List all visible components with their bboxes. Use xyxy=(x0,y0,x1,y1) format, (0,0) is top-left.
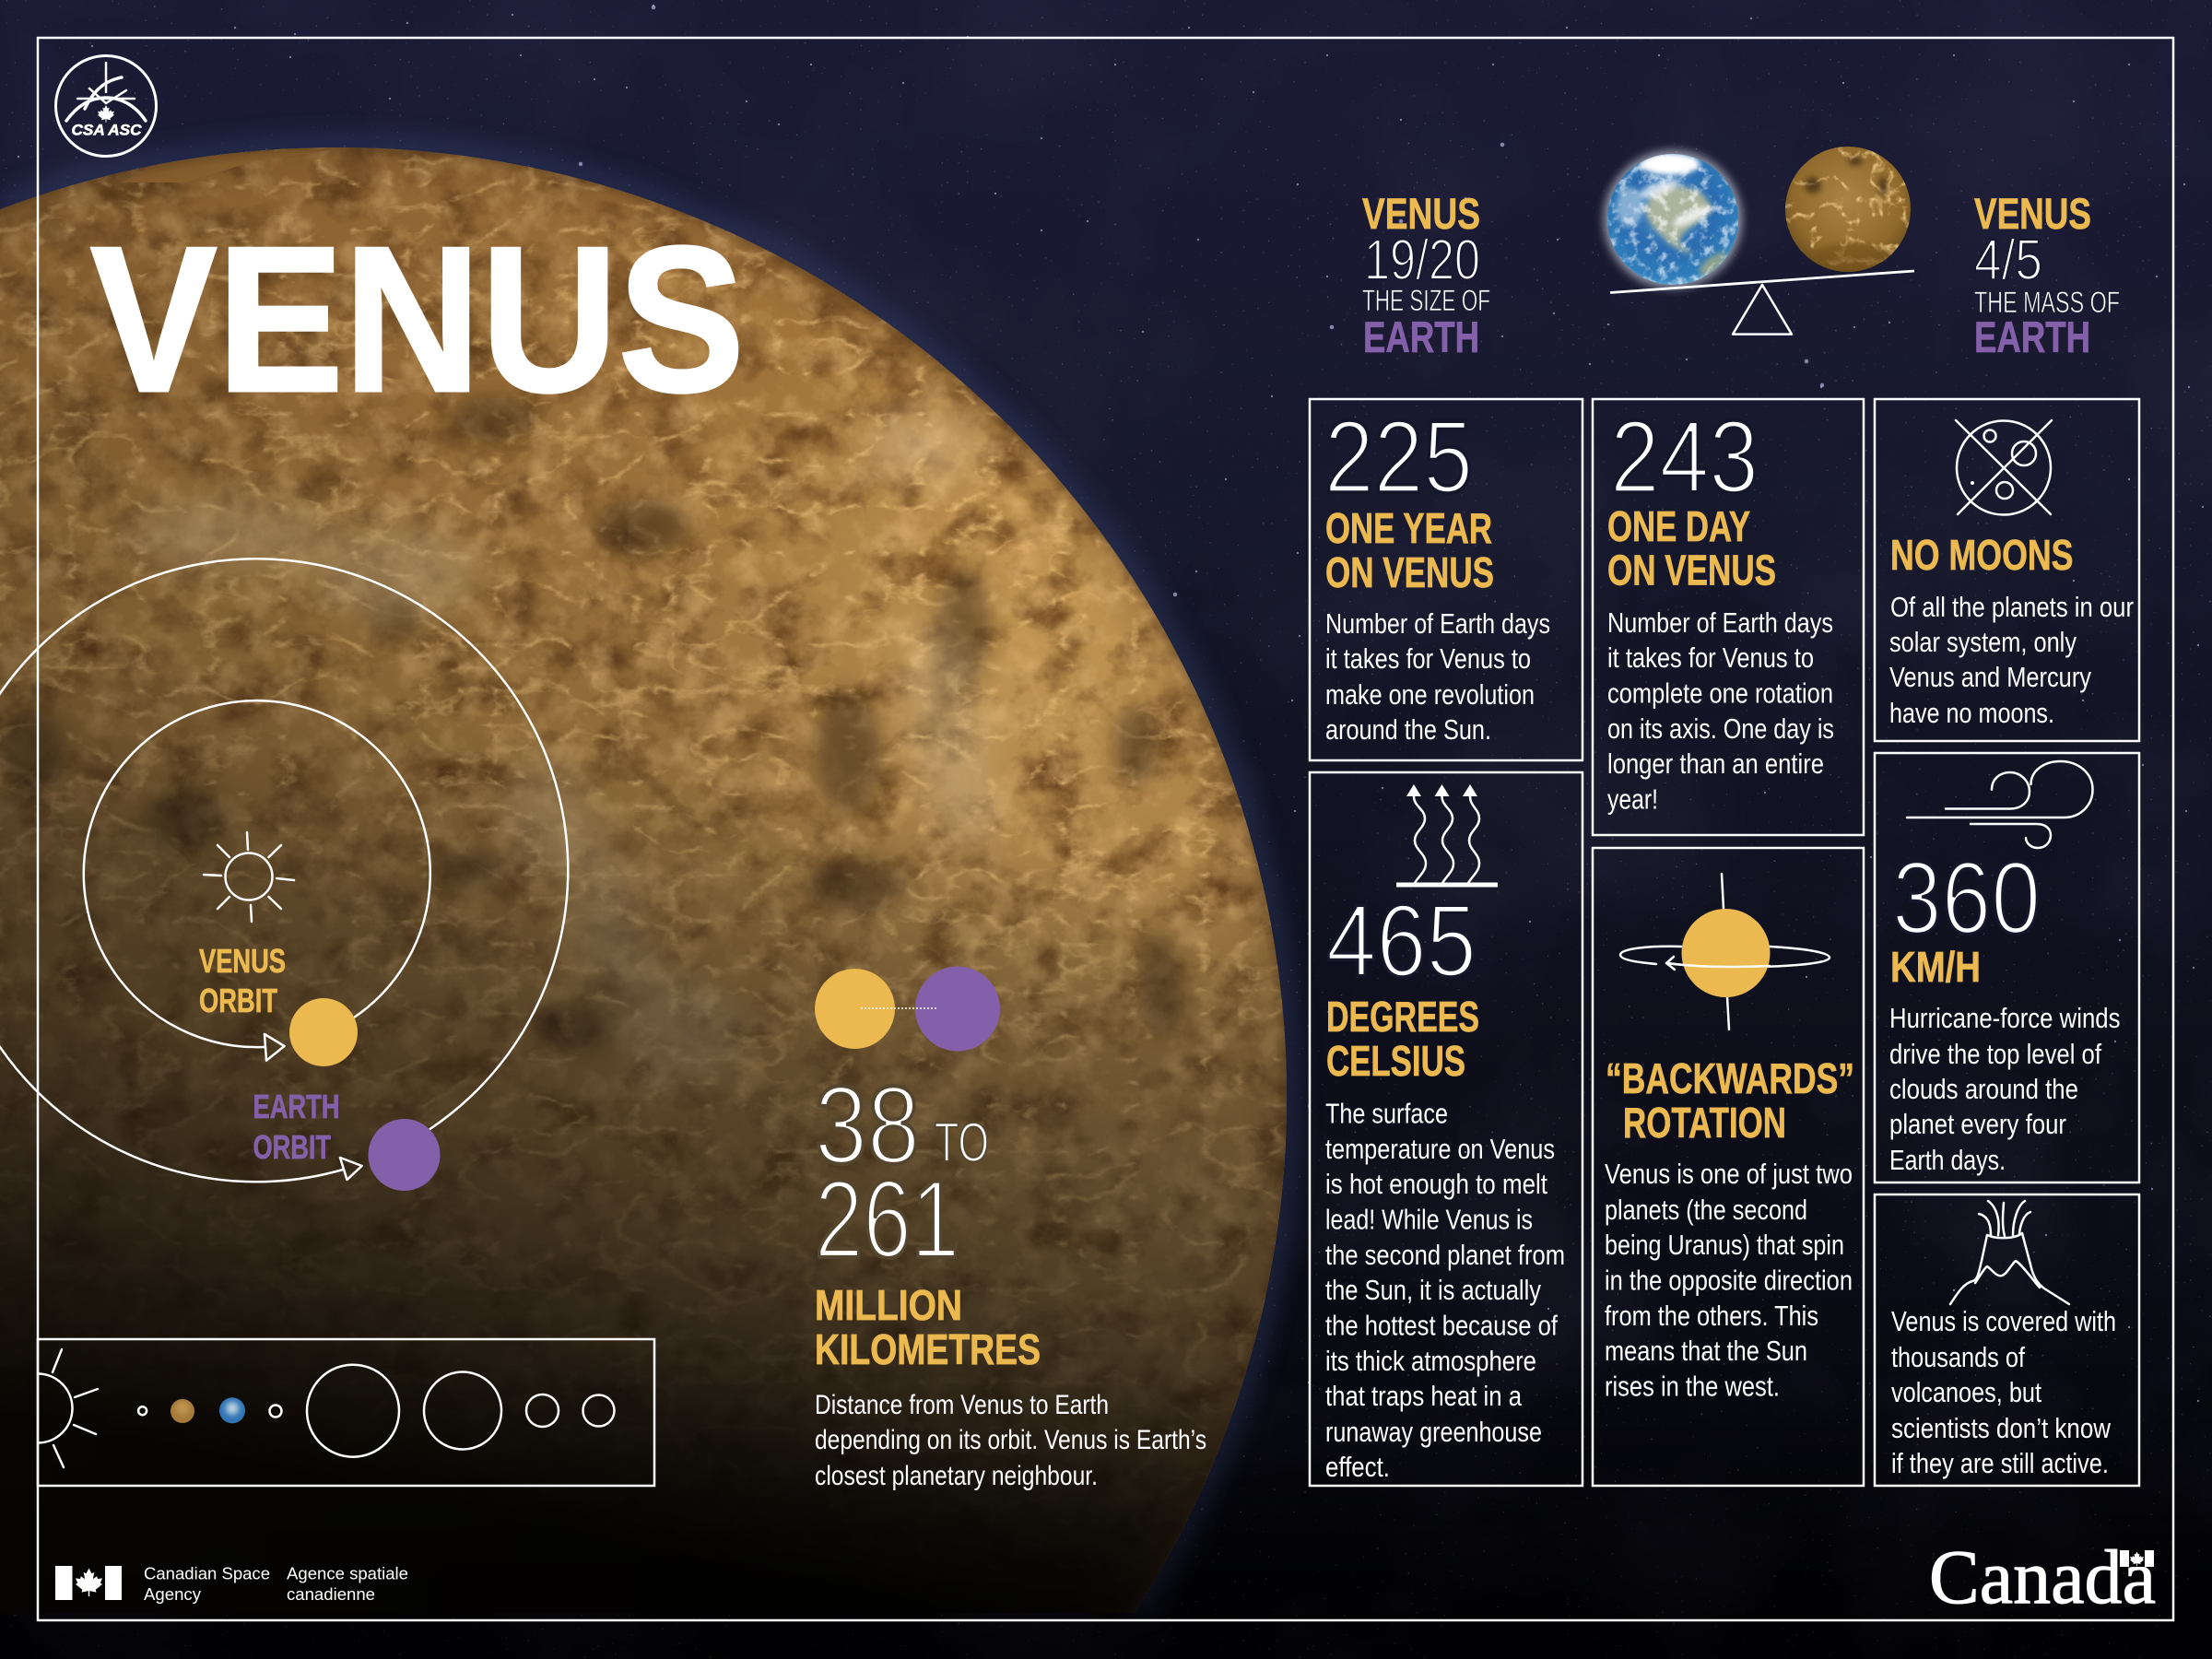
stat number: 360 xyxy=(1892,841,2041,955)
panel: degrees celsius xyxy=(1310,772,1583,1486)
icon: canadian flag xyxy=(55,1566,122,1600)
logo: CSA ASC: CSA ASC xyxy=(72,122,142,139)
description: Venus is one of just two xyxy=(1605,1158,1853,1190)
distance heading xyxy=(815,1281,1041,1373)
description: planets (the second xyxy=(1605,1194,1807,1226)
mass comparison text: THE MASS OF xyxy=(1974,286,2120,319)
footer: agency signature xyxy=(55,1565,408,1604)
stat number: 225 xyxy=(1324,400,1473,514)
venus orbit xyxy=(84,700,430,1061)
description xyxy=(1325,607,1550,746)
heading: KM/H xyxy=(1890,943,1981,991)
heading: ROTATION xyxy=(1623,1099,1786,1147)
description: scientists don’t know xyxy=(1891,1412,2112,1444)
description: is hot enough to melt xyxy=(1325,1168,1547,1200)
icon: partial sun xyxy=(39,1347,100,1469)
icon: rising heat xyxy=(1396,784,1498,887)
planet Venus xyxy=(0,138,1309,1613)
scale beam xyxy=(1610,271,1914,293)
icon: distance circles xyxy=(815,966,1000,1051)
heading: DEGREES xyxy=(1326,993,1479,1041)
description: The surface xyxy=(1325,1097,1448,1130)
icon: spinning planet xyxy=(1620,874,1830,1030)
icon: volcano xyxy=(1950,1201,2069,1304)
description: Venus is covered with xyxy=(1891,1305,2116,1337)
description xyxy=(1889,1002,2120,1176)
description: planet every four xyxy=(1889,1108,2066,1140)
description: means that the Sun xyxy=(1605,1335,1807,1367)
lower vignette xyxy=(0,1364,2212,1659)
heading xyxy=(1607,502,1776,594)
description: Venus and Mercury xyxy=(1889,661,2091,693)
earth orbit label xyxy=(253,1088,339,1166)
dark patches xyxy=(2,396,1181,1051)
heading: CELSIUS xyxy=(1326,1037,1465,1085)
description: thousands of xyxy=(1891,1341,2025,1373)
distance numbers: 261 xyxy=(815,1158,959,1281)
description xyxy=(1325,1097,1565,1483)
size comparison text: 19/20 xyxy=(1364,229,1480,292)
description: Of all the planets in our xyxy=(1890,591,2134,623)
agency name english: Canadian Space xyxy=(144,1565,270,1583)
description xyxy=(1889,591,2134,729)
uranus xyxy=(526,1394,559,1427)
saturn xyxy=(424,1371,501,1449)
distance description xyxy=(815,1390,1206,1491)
mars xyxy=(269,1405,282,1418)
panel: one year xyxy=(1310,399,1583,760)
description: year! xyxy=(1607,783,1658,815)
logo: CSA ASC xyxy=(55,55,157,157)
size comparison text: VENUS xyxy=(1362,189,1480,238)
distance section xyxy=(815,966,1206,1491)
description: the Sun, it is actually xyxy=(1325,1274,1541,1306)
description: make one revolution xyxy=(1325,678,1535,711)
agency name french xyxy=(287,1565,408,1604)
icon: sun xyxy=(204,832,294,922)
agency name english: Agency xyxy=(144,1585,201,1604)
neptune xyxy=(582,1395,614,1427)
distance heading: MILLION xyxy=(815,1281,962,1329)
agency name french: Agence spatiale xyxy=(287,1565,408,1583)
description: volcanoes, but xyxy=(1891,1376,2041,1408)
heading xyxy=(1326,993,1479,1085)
venus orbit label xyxy=(199,942,286,1019)
agency name french: canadienne xyxy=(287,1585,375,1604)
title: VENUS xyxy=(90,203,745,435)
icon: wordmark flag xyxy=(2120,1550,2154,1567)
description: from the others. This xyxy=(1605,1300,1818,1332)
icon: earth xyxy=(1604,150,1742,288)
distance description: closest planetary neighbour. xyxy=(815,1461,1098,1491)
description: solar system, only xyxy=(1889,626,2077,658)
description: if they are still active. xyxy=(1891,1447,2109,1479)
description: complete one rotation xyxy=(1607,677,1833,710)
balance scale with planets xyxy=(1604,147,1914,335)
description: clouds around the xyxy=(1889,1073,2078,1105)
light streaks xyxy=(129,408,1010,1088)
description: rises in the west. xyxy=(1605,1370,1780,1403)
mass comparison text: 4/5 xyxy=(1974,229,2042,292)
heading: ON VENUS xyxy=(1325,548,1494,596)
icon: venus xyxy=(1785,147,1911,272)
description: Earth days. xyxy=(1889,1144,2006,1176)
panel: wind speed xyxy=(1875,753,2139,1182)
description: in the opposite direction xyxy=(1605,1265,1853,1296)
stat number: 465 xyxy=(1326,884,1477,998)
description xyxy=(1891,1305,2116,1479)
description: Hurricane-force winds xyxy=(1889,1002,2120,1034)
earth xyxy=(219,1397,245,1423)
distance description: Distance from Venus to Earth xyxy=(815,1390,1109,1420)
description: the hottest because of xyxy=(1325,1310,1558,1342)
description: longer than an entire xyxy=(1607,747,1824,780)
description: Number of Earth days xyxy=(1325,607,1550,640)
description: Number of Earth days xyxy=(1607,606,1833,639)
jupiter xyxy=(307,1365,399,1457)
heading: “BACKWARDS” xyxy=(1606,1054,1854,1102)
footer: canada wordmark: Canada xyxy=(1929,1535,2156,1620)
venus orbit label: ORBIT xyxy=(199,982,277,1019)
description: it takes for Venus to xyxy=(1325,642,1531,675)
heading: ONE DAY xyxy=(1607,502,1750,550)
panel: volcanoes xyxy=(1875,1194,2139,1486)
heading: ONE YEAR xyxy=(1325,504,1492,552)
scale fulcrum xyxy=(1733,285,1792,335)
description xyxy=(1605,1158,1853,1403)
description: around the Sun. xyxy=(1325,713,1491,746)
agency name english xyxy=(144,1565,270,1604)
description: lead! While Venus is xyxy=(1325,1204,1533,1236)
mass comparison text: EARTH xyxy=(1974,312,2090,361)
heading: ON VENUS xyxy=(1607,546,1776,594)
description xyxy=(1607,606,1834,815)
mass comparison text: VENUS xyxy=(1974,189,2091,238)
description: being Uranus) that spin xyxy=(1605,1229,1844,1261)
earth orbit xyxy=(0,559,568,1182)
description: runaway greenhouse xyxy=(1325,1416,1542,1448)
description: effect. xyxy=(1325,1451,1390,1483)
description: temperature on Venus xyxy=(1325,1133,1555,1165)
panel: solar system strip xyxy=(4,1339,654,1486)
description: on its axis. One day is xyxy=(1607,712,1834,745)
earth marker xyxy=(369,1119,441,1191)
description: that traps heat in a xyxy=(1325,1380,1523,1412)
description: it takes for Venus to xyxy=(1607,641,1814,674)
panel: one day xyxy=(1593,399,1864,835)
description: the second planet from xyxy=(1325,1239,1565,1271)
heading xyxy=(1606,1054,1854,1147)
description: drive the top level of xyxy=(1889,1038,2101,1070)
planet atmosphere glow xyxy=(0,147,1287,1613)
description: its thick atmosphere xyxy=(1325,1345,1536,1377)
mercury xyxy=(138,1406,147,1415)
distance numbers: 38 xyxy=(815,1064,920,1187)
heading xyxy=(1325,504,1494,596)
size comparison text: EARTH xyxy=(1363,312,1479,361)
stat number: 243 xyxy=(1610,400,1759,514)
earth orbit label: ORBIT xyxy=(253,1128,331,1166)
venus xyxy=(171,1399,194,1423)
distance numbers: TO xyxy=(935,1112,989,1173)
venus orbit label: VENUS xyxy=(199,942,286,980)
venus marker xyxy=(289,998,358,1066)
distance numbers xyxy=(815,1064,989,1281)
panel: backwards rotation xyxy=(1593,848,1864,1486)
panel: no moons xyxy=(1875,399,2139,741)
mass comparison text xyxy=(1974,189,2120,361)
distance heading: KILOMETRES xyxy=(815,1325,1041,1373)
distance description: depending on its orbit. Venus is Earth’s xyxy=(815,1425,1206,1455)
heading: NO MOONS xyxy=(1890,531,2074,579)
icon: wind xyxy=(1907,761,2092,848)
orbit diagram xyxy=(0,559,568,1191)
description: have no moons. xyxy=(1889,697,2054,729)
size comparison text xyxy=(1362,189,1490,361)
earth orbit label: EARTH xyxy=(253,1088,339,1125)
icon: crossed out moons xyxy=(1956,420,2052,514)
size comparison text: THE SIZE OF xyxy=(1362,284,1490,317)
